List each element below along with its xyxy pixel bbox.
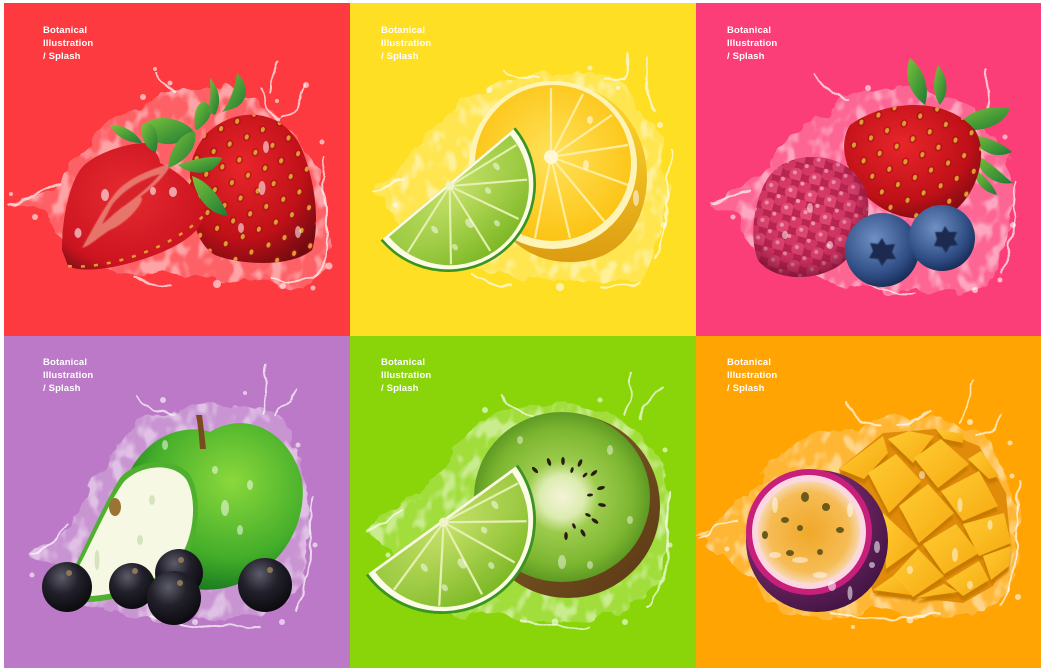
- lime wedge: kiwi panel: [365, 463, 573, 651]
- lime wedge: [379, 126, 572, 308]
- caption: kiwi: / Splash: [381, 383, 419, 394]
- caption: kiwi: [381, 357, 431, 394]
- half strawberry: [62, 143, 205, 270]
- caption: lemon: Illustration: [381, 38, 431, 49]
- caption: berries: / Splash: [727, 51, 765, 62]
- strawberry leaves: [110, 73, 246, 216]
- juice splash: berries: [712, 70, 1016, 293]
- panel: mango and passion fruit splash: [696, 336, 1041, 668]
- caption: kiwi: Illustration: [381, 370, 431, 381]
- black currants: [42, 549, 292, 625]
- panel: lemon and lime splash: [350, 3, 696, 336]
- caption: mango: Botanical: [727, 357, 771, 368]
- juice splash: lemon: [372, 55, 672, 291]
- leaves: berries: [907, 58, 1013, 195]
- caption: apple: Botanical: [43, 357, 87, 368]
- blueberry small: [909, 205, 975, 271]
- caption: mango: / Splash: [727, 383, 765, 394]
- panel: kiwi and lime splash: [350, 336, 696, 668]
- caption: mango: Illustration: [727, 370, 777, 381]
- caption: berries: Botanical: [727, 25, 771, 36]
- lemon: [469, 81, 647, 262]
- caption: apple: [43, 357, 93, 394]
- panel: berries splash: [696, 3, 1041, 336]
- caption: lemon: [381, 25, 431, 62]
- caption: lemon: / Splash: [381, 51, 419, 62]
- blueberry large: [845, 213, 919, 287]
- juice splash: apple: [28, 365, 318, 628]
- panel: apple and currants splash: [4, 336, 350, 668]
- caption: strawberry: [43, 25, 93, 62]
- caption: strawberry: Botanical: [43, 25, 87, 36]
- juice splash: mango: [698, 380, 1021, 629]
- kiwi: [474, 412, 660, 598]
- panel: strawberry splash: [4, 3, 350, 336]
- passion fruit: [746, 469, 888, 612]
- strawberry: berries: [844, 105, 981, 218]
- caption: apple: / Splash: [43, 383, 81, 394]
- apple half: [62, 462, 198, 602]
- mango: [839, 429, 1011, 603]
- whole strawberry: [190, 115, 316, 263]
- caption: mango: [727, 357, 777, 394]
- caption: kiwi: Botanical: [381, 357, 425, 368]
- juice splash: kiwi: [365, 372, 672, 627]
- caption: berries: Illustration: [727, 38, 777, 49]
- raspberry: [753, 157, 868, 277]
- caption: strawberry: / Splash: [43, 51, 81, 62]
- caption: berries: [727, 25, 777, 62]
- caption: strawberry: Illustration: [43, 38, 93, 49]
- caption: lemon: Botanical: [381, 25, 425, 36]
- green apple: [125, 415, 303, 590]
- juice splash: strawberry: [8, 62, 332, 290]
- caption: apple: Illustration: [43, 370, 93, 381]
